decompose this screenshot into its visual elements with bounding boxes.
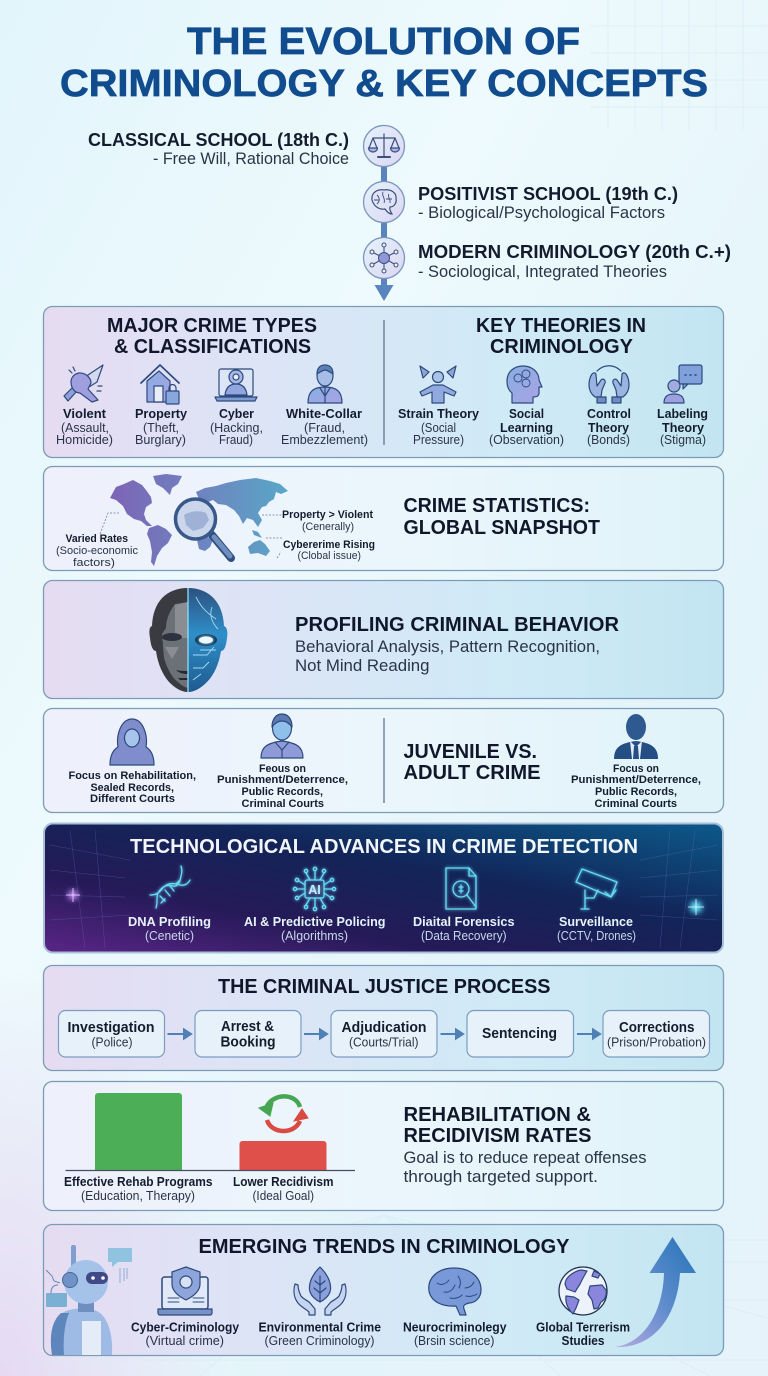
- label: property: [135, 406, 188, 447]
- label: juvenile focus: Different Courts: [90, 793, 175, 805]
- icon: recycle arrows: [259, 1096, 308, 1131]
- label: surveillance: (CCTV, Drones): [557, 929, 636, 943]
- label: juvenile focus: Focus on Rehabilitation,: [68, 770, 196, 782]
- heading: process: THE CRIMINAL JUSTICE PROCESS: [218, 976, 550, 998]
- callout: varied rates: Varied Rates: [66, 533, 128, 545]
- icon: labeling theory: [664, 365, 702, 403]
- callout: varied rates: factors): [73, 557, 115, 569]
- text: classical school: - Free Will, Rational Choice: [153, 149, 349, 168]
- label: rehab programs: Effective Rehab Programs: [64, 1174, 212, 1189]
- label: labeling theory: Theory: [662, 420, 705, 435]
- label: social learning: Learning: [500, 420, 553, 435]
- heading: major crime types: MAJOR CRIME TYPES: [107, 315, 317, 337]
- label: white-collar: White-Collar: [286, 406, 362, 421]
- label: surveillance: Surveillance: [559, 914, 633, 929]
- text: modern criminology: [418, 242, 731, 281]
- label: white-collar: (Fraud,: [304, 421, 345, 435]
- icon: control theory: [589, 366, 629, 403]
- heading: rehabilitation: REHABILITATION &: [404, 1104, 591, 1126]
- panel: rehabilitation: [44, 1082, 724, 1210]
- step: sentencing: [467, 1010, 574, 1057]
- callout: property vs violent: (Cenerally): [302, 521, 354, 533]
- title: THE EVOLUTION OF: [187, 21, 580, 63]
- panel: profiling: [44, 580, 724, 698]
- label: DNA profiling: (Cenetic): [145, 929, 194, 943]
- label: strain theory: Pressure): [413, 433, 464, 447]
- heading: major crime types: [107, 315, 317, 358]
- icon: big upward arrow: [614, 1237, 696, 1347]
- heading: juvenile vs adult: ADULT CRIME: [404, 762, 540, 784]
- panel: technological advances: [44, 824, 723, 952]
- heading: major crime types: & CLASSIFICATIONS: [114, 336, 311, 358]
- label: social learning: (Observation): [489, 433, 564, 447]
- label: violent: Homicide): [56, 433, 113, 447]
- label: cyber: Fraud): [219, 433, 253, 447]
- label: adult focus right: [571, 763, 701, 810]
- text: positivist school: - Biological/Psychological Factors: [418, 203, 665, 222]
- label: rehab programs: [64, 1174, 212, 1203]
- label: adult focus: Public Records,: [242, 786, 323, 798]
- step: adjudication: (Courts/Trial): [349, 1036, 418, 1050]
- label: lower recidivism: Lower Recidivism: [233, 1174, 334, 1189]
- arrow: [304, 1030, 327, 1038]
- bar chart: [66, 1093, 355, 1170]
- label: adult focus: Punishment/Deterrence,: [217, 774, 348, 786]
- label: digital forensics: [413, 914, 514, 943]
- panel: criminal justice process: [44, 966, 724, 1070]
- label: strain theory: (Social: [421, 421, 456, 435]
- label: property: Burglary): [135, 433, 186, 447]
- heading: emerging trends: EMERGING TRENDS IN CRIMINOLOGY: [198, 1236, 570, 1258]
- icon: social learning: [507, 366, 542, 403]
- icon: robot: [46, 1245, 132, 1355]
- icon: magnifier: [176, 499, 231, 558]
- label: property: Property: [135, 406, 188, 421]
- step: arrest and booking: [195, 1010, 301, 1057]
- text: profiling description: [295, 637, 600, 675]
- label: AI predictive policing: AI & Predictive Policing: [244, 914, 386, 929]
- label: control theory: [587, 406, 631, 447]
- label: social learning: Social: [509, 406, 544, 421]
- label: labeling theory: Labeling: [657, 406, 708, 421]
- label: rehab programs: (Education, Therapy): [81, 1189, 195, 1203]
- label: control theory: Theory: [588, 420, 630, 435]
- text: classical school: CLASSICAL SCHOOL (18th C.): [88, 130, 349, 150]
- label: cyber: (Hacking,: [210, 421, 263, 435]
- text: profiling description: Behavioral Analysis, Pattern Recognition,: [295, 637, 600, 656]
- label: adult focus right: Public Records,: [595, 786, 677, 798]
- label: DNA profiling: DNA Profiling: [128, 914, 211, 929]
- callout: cybercrime rising: [283, 539, 375, 562]
- text: rehabilitation goal: Goal is to reduce repeat offenses: [404, 1148, 646, 1167]
- label: adult focus: Criminal Courts: [242, 798, 324, 810]
- heading: crime statistics: GLOBAL SNAPSHOT: [404, 517, 600, 539]
- label: juvenile focus: Sealed Records,: [90, 782, 174, 794]
- arrow: [577, 1030, 600, 1038]
- label: property: (Theft,: [143, 421, 179, 435]
- label: cyber-criminology: (Virtual crime): [146, 1334, 224, 1348]
- text: classical school: [88, 130, 349, 168]
- step: investigation: [58, 1010, 164, 1057]
- label: AI predictive policing: [244, 914, 386, 943]
- world map: [110, 474, 288, 566]
- callout: property vs violent: [282, 509, 373, 533]
- label: global terrorism: [536, 1320, 630, 1348]
- icon: surveillance camera: [576, 869, 617, 909]
- label: adult focus right: Focus on: [613, 763, 659, 775]
- step: adjudication: Adjudication: [342, 1020, 426, 1036]
- step: sentencing: Sentencing: [482, 1026, 557, 1042]
- icon: property: [141, 365, 179, 404]
- label: social learning: [489, 406, 564, 447]
- heading: juvenile vs adult: JUVENILE VS.: [404, 741, 537, 763]
- label: cyber: [210, 406, 263, 447]
- label: strain theory: Strain Theory: [398, 406, 480, 421]
- icon: violent: [64, 365, 103, 402]
- label: cyber-criminology: [131, 1320, 240, 1348]
- callout: varied rates: (Socio-economic: [56, 545, 138, 557]
- label: adult focus: [217, 763, 348, 810]
- step: corrections: (Prison/Probation): [607, 1036, 706, 1050]
- heading: crime statistics: CRIME STATISTICS:: [404, 495, 590, 517]
- label: digital forensics: Diaital Forensics: [413, 914, 514, 929]
- callout: varied rates: [56, 533, 138, 569]
- label: environmental crime: [258, 1320, 381, 1348]
- label: cyber-criminology: Cyber-Criminology: [131, 1320, 240, 1334]
- icon: split face: [149, 588, 227, 692]
- icon: global terrorism globe: [559, 1267, 607, 1315]
- label: surveillance: [557, 914, 636, 943]
- label: lower recidivism: [233, 1174, 334, 1203]
- icon: hooded juvenile: [110, 719, 154, 765]
- icon: adult man in suit: [614, 714, 658, 759]
- icon: cyber: [215, 369, 257, 401]
- heading: rehabilitation: [404, 1104, 592, 1147]
- label: AI predictive policing: (Algorithms): [281, 929, 348, 943]
- icon: neurocriminology brain: [429, 1268, 481, 1315]
- panel: juvenile vs adult: [44, 708, 724, 812]
- text: positivist school: POSITIVIST SCHOOL (19th C.): [418, 184, 678, 204]
- label: violent: [56, 406, 113, 447]
- label: environmental crime: (Green Criminology): [264, 1334, 374, 1348]
- label: global terrorism: Studies: [562, 1333, 604, 1348]
- label: environmental crime: Environmental Crime: [258, 1320, 381, 1334]
- heading: rehabilitation: RECIDIVISM RATES: [404, 1125, 592, 1147]
- step: investigation: Investigation: [68, 1020, 154, 1036]
- text: profiling description: Not Mind Reading: [295, 656, 430, 675]
- heading: profiling: PROFILING CRIMINAL BEHAVIOR: [295, 614, 620, 636]
- callout: cybercrime rising: Cybererime Rising: [283, 539, 375, 551]
- callout: property vs violent: Property > Violent: [282, 509, 373, 521]
- label: adult focus: Feous on: [259, 763, 306, 775]
- icon: strain theory: [420, 366, 456, 403]
- panel: crime types and theories: [44, 306, 724, 458]
- heading: crime statistics: [404, 495, 600, 539]
- text: positivist school: [418, 184, 678, 222]
- icon: AI chip: [293, 867, 336, 911]
- label: control theory: (Bonds): [587, 433, 630, 447]
- label: labeling theory: [657, 406, 708, 447]
- label: violent: (Assault,: [61, 421, 109, 435]
- timeline: [364, 126, 404, 301]
- text: modern criminology: - Sociological, Integrated Theories: [418, 262, 667, 281]
- icon: DNA: [150, 866, 190, 908]
- label: adult focus right: Criminal Courts: [594, 798, 677, 810]
- callout: cybercrime rising: (Clobal issue): [298, 550, 361, 562]
- panel: emerging trends: [44, 1224, 724, 1356]
- arrow: [168, 1030, 191, 1038]
- label: strain theory: [398, 406, 480, 447]
- label: labeling theory: (Stigma): [660, 433, 706, 447]
- step: investigation: (Police): [92, 1036, 132, 1050]
- step: corrections: Corrections: [619, 1020, 694, 1036]
- label: neurocriminology: Neurocriminolegy: [403, 1320, 507, 1334]
- arrow: [440, 1030, 463, 1038]
- icon: digital forensics: [446, 868, 476, 909]
- step: arrest and booking: Booking: [220, 1034, 276, 1050]
- icon: adult man outline: [261, 714, 303, 758]
- label: neurocriminology: (Brsin science): [414, 1334, 494, 1348]
- text: rehabilitation goal: through targeted support.: [404, 1167, 598, 1186]
- panel: crime statistics: [44, 466, 724, 570]
- label: adult focus right: Punishment/Deterrence,: [571, 774, 701, 786]
- heading: key theories: KEY THEORIES IN: [476, 315, 646, 337]
- label: digital forensics: (Data Recovery): [421, 929, 506, 943]
- step: arrest and booking: Arrest &: [221, 1019, 274, 1035]
- text: modern criminology: MODERN CRIMINOLOGY (20th C.+): [418, 242, 731, 262]
- label: violent: Violent: [63, 406, 107, 421]
- icon: network: [364, 238, 404, 278]
- icon: scales: [364, 126, 404, 166]
- label: lower recidivism: (Ideal Goal): [252, 1189, 314, 1203]
- heading: technological advances: TECHNOLOGICAL ADVANCES IN CRIME DETECTION: [130, 835, 638, 858]
- icon: environmental crime plant: [294, 1267, 346, 1315]
- label: white-collar: Embezzlement): [281, 433, 368, 447]
- label: juvenile focus: [68, 770, 196, 805]
- icon: brain: [364, 182, 404, 222]
- label: cyber: Cyber: [219, 406, 254, 421]
- text: rehabilitation goal: [404, 1148, 646, 1186]
- step: adjudication: [331, 1010, 437, 1057]
- step: corrections: [603, 1010, 710, 1057]
- title: [60, 21, 708, 105]
- label: DNA profiling: [128, 914, 211, 943]
- heading: key theories: CRIMINOLOGY: [490, 336, 634, 358]
- icon: white-collar: [308, 365, 342, 403]
- icon: cyber-criminology laptop: [158, 1267, 212, 1315]
- label: neurocriminology: [403, 1320, 507, 1348]
- icon: AI chip: AI: [308, 883, 321, 897]
- heading: key theories: [476, 315, 646, 358]
- timeline connector: [374, 166, 394, 301]
- label: global terrorism: Global Terrerism: [536, 1320, 630, 1334]
- heading: juvenile vs adult: [404, 741, 540, 784]
- title: CRIMINOLOGY & KEY CONCEPTS: [60, 63, 708, 105]
- label: control theory: Control: [587, 406, 631, 421]
- label: white-collar: [281, 406, 368, 447]
